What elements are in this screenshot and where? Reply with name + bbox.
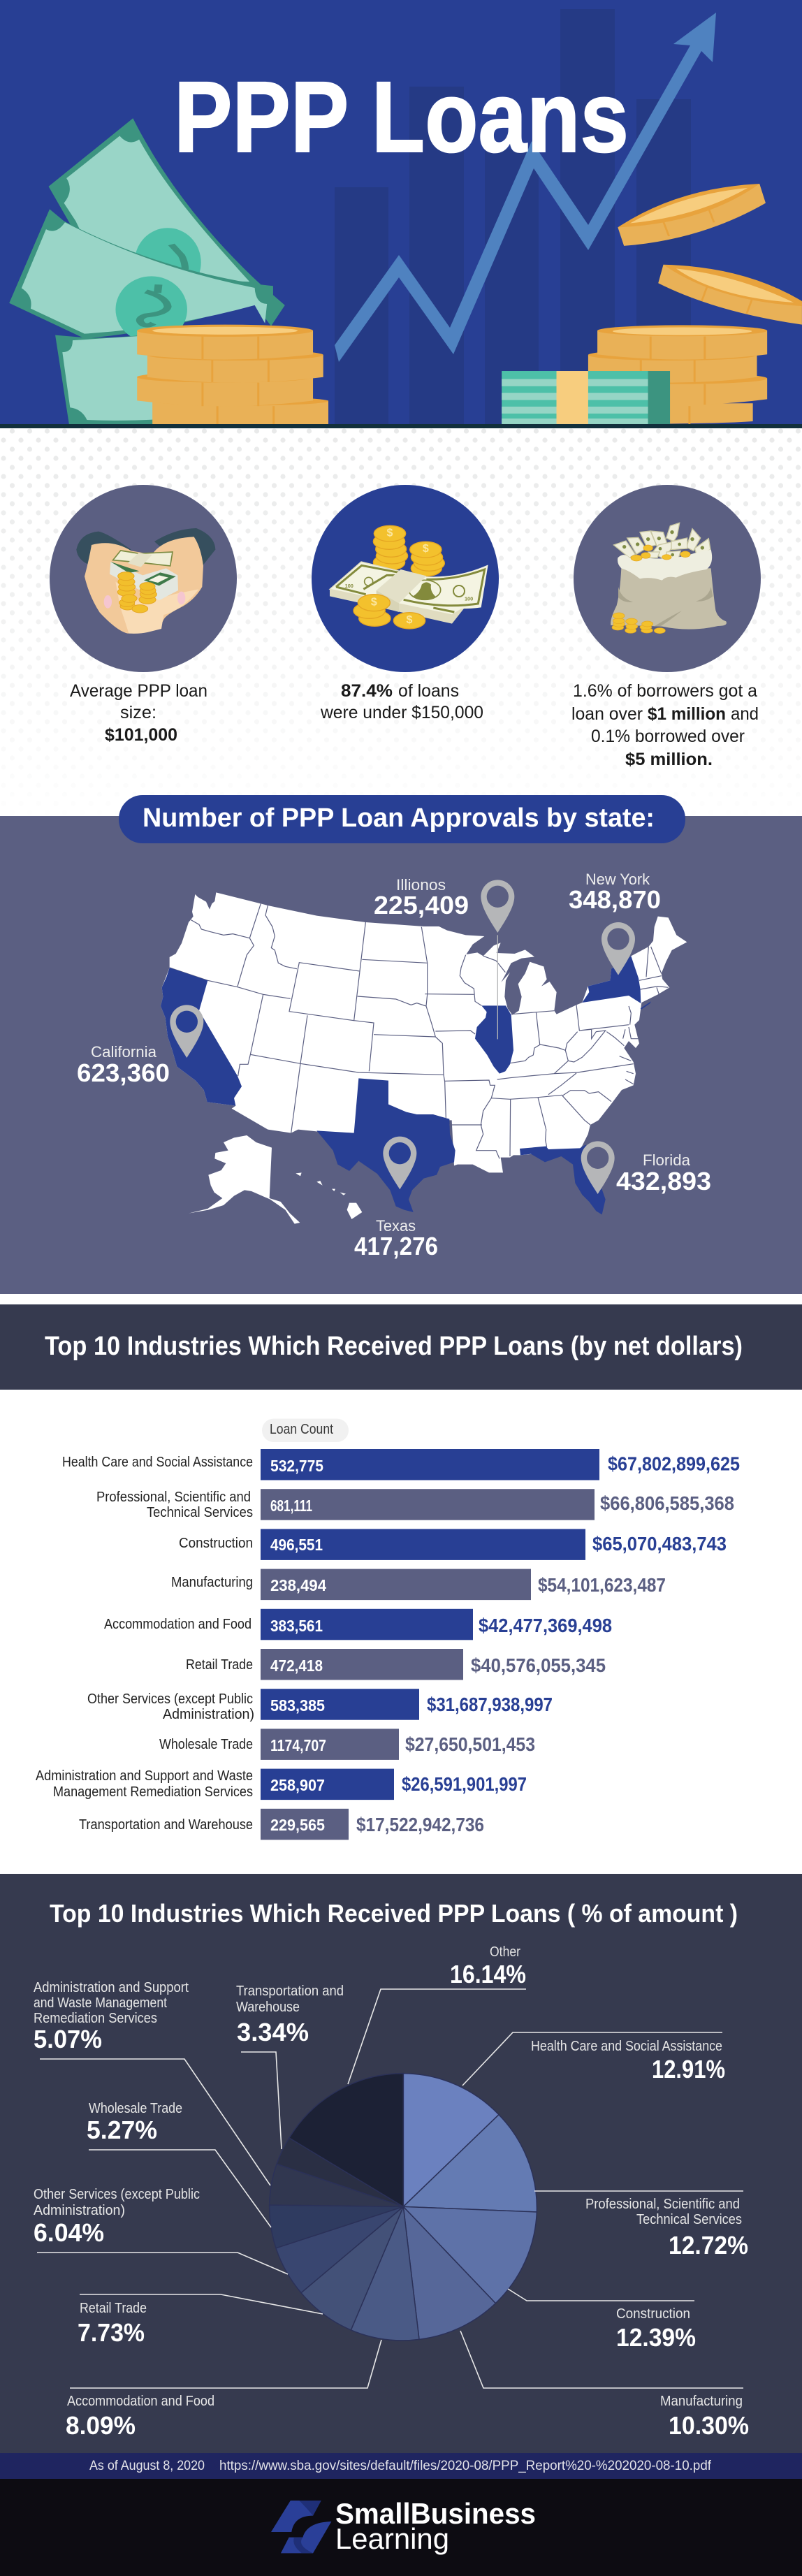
row: retail: Retail Trade [186,1657,253,1673]
label: transportation: Warehouse [236,2000,300,2015]
row: retail [186,1649,606,1680]
label: other: Other [490,1944,520,1960]
hawaii [296,1172,362,1219]
icon: coins and cash: 100 [465,595,473,602]
label: administration [34,1980,270,2185]
label: construction: 12.39% [616,2323,696,2352]
row: other services: Other Services (except Public [87,1691,253,1707]
alaska [189,1135,300,1224]
icon: coins and cash: $ [371,597,377,609]
source band: https://www.sba.gov/sites/default/files/2020-08/PPP_Report%20-%202020-08-10.pdf [219,2459,712,2473]
stat text: loan over [571,704,643,724]
stat text: 87.4% [341,681,393,701]
stat: loans under 150000 [312,485,499,722]
callout: florida: Florida [643,1151,691,1169]
row: professional [96,1489,734,1520]
right coin stack [588,325,767,424]
row: administration: Management Remediation Services [53,1784,253,1800]
row: administration: 258,907 [270,1776,325,1794]
label: other services: 6.04% [34,2218,104,2247]
stat text: Average PPP loan [70,681,207,701]
row: manufacturing: $54,101,623,487 [538,1574,666,1596]
icon: money bag [611,523,727,634]
label: other services: Other Services (except Public [34,2187,200,2202]
stat text: of loans [398,681,459,701]
label: professional: Professional, Scientific and [585,2197,740,2212]
bar chart: industries by net dollars [36,1418,740,1840]
panel: bar chart header: Top 10 Industries Which Received PPP Loans (by net dollars) [45,1332,743,1361]
bill middle [9,209,285,342]
label: administration: and Waste Management [34,1995,167,2011]
row: other services: $31,687,938,997 [427,1694,553,1715]
label: other: 16.14% [450,1960,526,1988]
row: construction: Construction [179,1536,253,1551]
row: wholesale: $27,650,501,453 [405,1733,535,1755]
callout: california: 623,360 [77,1058,170,1087]
row: accommodation [104,1609,612,1640]
cash bundle [502,371,670,424]
callout: new york: New York [585,871,650,888]
flying coin lower [658,265,802,325]
left coin stack [137,325,328,424]
dotted stats background [0,428,802,816]
row: construction: $65,070,483,743 [592,1533,727,1555]
row: transportation: Transportation and Warehouse [79,1817,253,1833]
pie chart [270,2074,537,2341]
stat text: $5 million. [625,750,713,769]
row: health care: 532,775 [270,1457,323,1475]
logo icon [271,2501,331,2553]
row: transportation: 229,565 [270,1816,325,1834]
label: retail [78,2294,323,2347]
label: manufacturing: 10.30% [669,2411,749,2440]
label: health care: Health Care and Social Assistance [531,2039,722,2054]
icon: coins and cash: $ [407,614,413,626]
label: transportation: Transportation and [236,1984,344,1999]
label: professional [534,2191,748,2260]
label: construction: Construction [616,2306,690,2322]
label: health care: 12.91% [652,2055,725,2083]
label: retail: 7.73% [78,2318,145,2347]
source band: As of August 8, 2020 [89,2459,205,2473]
row: accommodation: $42,477,369,498 [479,1615,612,1636]
stat text: size: [120,703,156,722]
bill back [49,118,261,304]
heading pill [119,795,685,843]
stat text: were under $150,000 [320,703,483,722]
row: manufacturing: 238,494 [270,1576,326,1594]
icon: coins and cash: $ [423,543,429,555]
label: other [348,1944,526,2084]
eastern states [425,947,669,1214]
row: construction: 496,551 [270,1536,323,1554]
logo wordmark: Learning [335,2522,449,2555]
row: accommodation: 383,561 [270,1617,323,1635]
row: other services: 583,385 [270,1696,325,1715]
panel: state map [0,795,802,1294]
panel: bar chart header [0,1304,802,1390]
title: PPP Loans [174,61,629,173]
stat: average loan size [50,485,237,745]
row: construction [179,1529,727,1560]
stat text: $1 million [648,704,726,724]
heading pill: Number of PPP Loan Approvals by state: [143,803,655,833]
label: accommodation: Accommodation and Food [67,2394,214,2409]
icon: coins and cash: $ [387,527,393,539]
label: accommodation: 8.09% [66,2411,136,2440]
panel: pie chart [0,1874,802,2453]
legend: loan count: Loan Count [270,1422,333,1437]
row: wholesale [159,1729,535,1760]
row: retail: 472,418 [270,1657,323,1675]
row: professional: Technical Services [147,1505,253,1520]
label: wholesale: 5.27% [87,2116,157,2144]
label: administration: 5.07% [34,2025,102,2053]
stat: large loans [571,485,761,769]
legend: loan count [262,1418,349,1442]
logo wordmark [335,2497,536,2555]
bill front [55,333,159,424]
stat text: 0.1% borrowed over [591,727,745,746]
label: wholesale: Wholesale Trade [89,2101,182,2116]
label: manufacturing: Manufacturing [660,2394,743,2409]
label: professional: Technical Services [636,2212,742,2227]
stat text [70,681,207,745]
row: other services [87,1689,553,1722]
stat text [571,681,759,769]
callout: texas: 417,276 [354,1232,438,1260]
stat text: $101,000 [105,725,177,745]
label: other services: Administration) [34,2203,125,2218]
callout: florida [581,1141,711,1195]
row: administration: $26,591,901,997 [402,1773,527,1795]
row: retail: $40,576,055,345 [471,1654,606,1676]
row: wholesale: 1174,707 [270,1736,326,1754]
icon: hands holding money [76,528,215,634]
western states [161,903,455,1224]
icon: coins and cash: 100 [345,583,353,589]
callout: california: California [91,1043,157,1061]
row: administration: Administration and Support and Waste [36,1768,253,1784]
row: professional: Professional, Scientific and [96,1490,251,1505]
source band [0,2453,802,2479]
callout: texas: Texas [376,1217,416,1235]
stat text [320,681,483,722]
background bars [335,9,691,424]
map: united states [161,892,687,1224]
label: accommodation [66,2340,381,2440]
mainland silhouette [161,892,687,1172]
state: florida [520,1144,606,1214]
heading: Top 10 Industries Which Received PPP Loans ( % of amount ) [50,1899,738,1928]
state: illinois [475,1005,513,1074]
row: manufacturing [171,1569,666,1600]
label: health care [462,2032,725,2086]
callout: illinois: 225,409 [374,891,469,919]
label: administration: Administration and Support [34,1980,189,1995]
row: accommodation: Accommodation and Food [104,1617,251,1632]
state: texas [316,1078,455,1212]
logo wordmark: SmallBusiness [335,2497,536,2530]
stat text: 1.6% of borrowers got a [573,681,757,701]
footer [0,2479,802,2576]
label: administration: Remediation Services [34,2011,157,2026]
icon: coins and cash [330,525,488,629]
row: wholesale: Wholesale Trade [159,1737,253,1752]
rising arrow [335,13,716,362]
callout: texas [354,1137,438,1260]
row: other services: Administration) [163,1707,254,1722]
row: professional: 681,111 [270,1497,312,1515]
illustration: dollar bills and coins [9,118,802,424]
callout: new york [569,871,661,975]
label: transportation: 3.34% [237,2018,309,2046]
state: california [161,968,242,1106]
row: administration [36,1768,527,1800]
row: transportation: $17,522,942,736 [356,1814,484,1835]
row: health care: $67,802,899,625 [608,1453,740,1474]
callout: new york: 348,870 [569,885,661,914]
row: health care: Health Care and Social Assistance [62,1455,253,1470]
stat text: and [731,704,759,724]
flying coin upper [618,184,766,246]
label: retail: Retail Trade [80,2301,147,2316]
callout: florida: 432,893 [616,1167,711,1195]
row: manufacturing: Manufacturing [171,1575,253,1590]
label: construction [508,2289,696,2352]
callout: california [77,1005,203,1087]
label: other services [34,2187,288,2274]
row: health care [62,1449,740,1480]
label: professional: 12.72% [669,2231,748,2260]
row: transportation [79,1809,484,1840]
callout: illinois: Illionos [396,876,446,894]
state: new york [582,956,651,1010]
label: wholesale [87,2101,271,2227]
callout: illinois [374,876,514,1039]
label: manufacturing [460,2331,749,2440]
row: professional: $66,806,585,368 [600,1492,734,1514]
label: transportation [236,1984,344,2149]
hero banner [0,0,802,428]
